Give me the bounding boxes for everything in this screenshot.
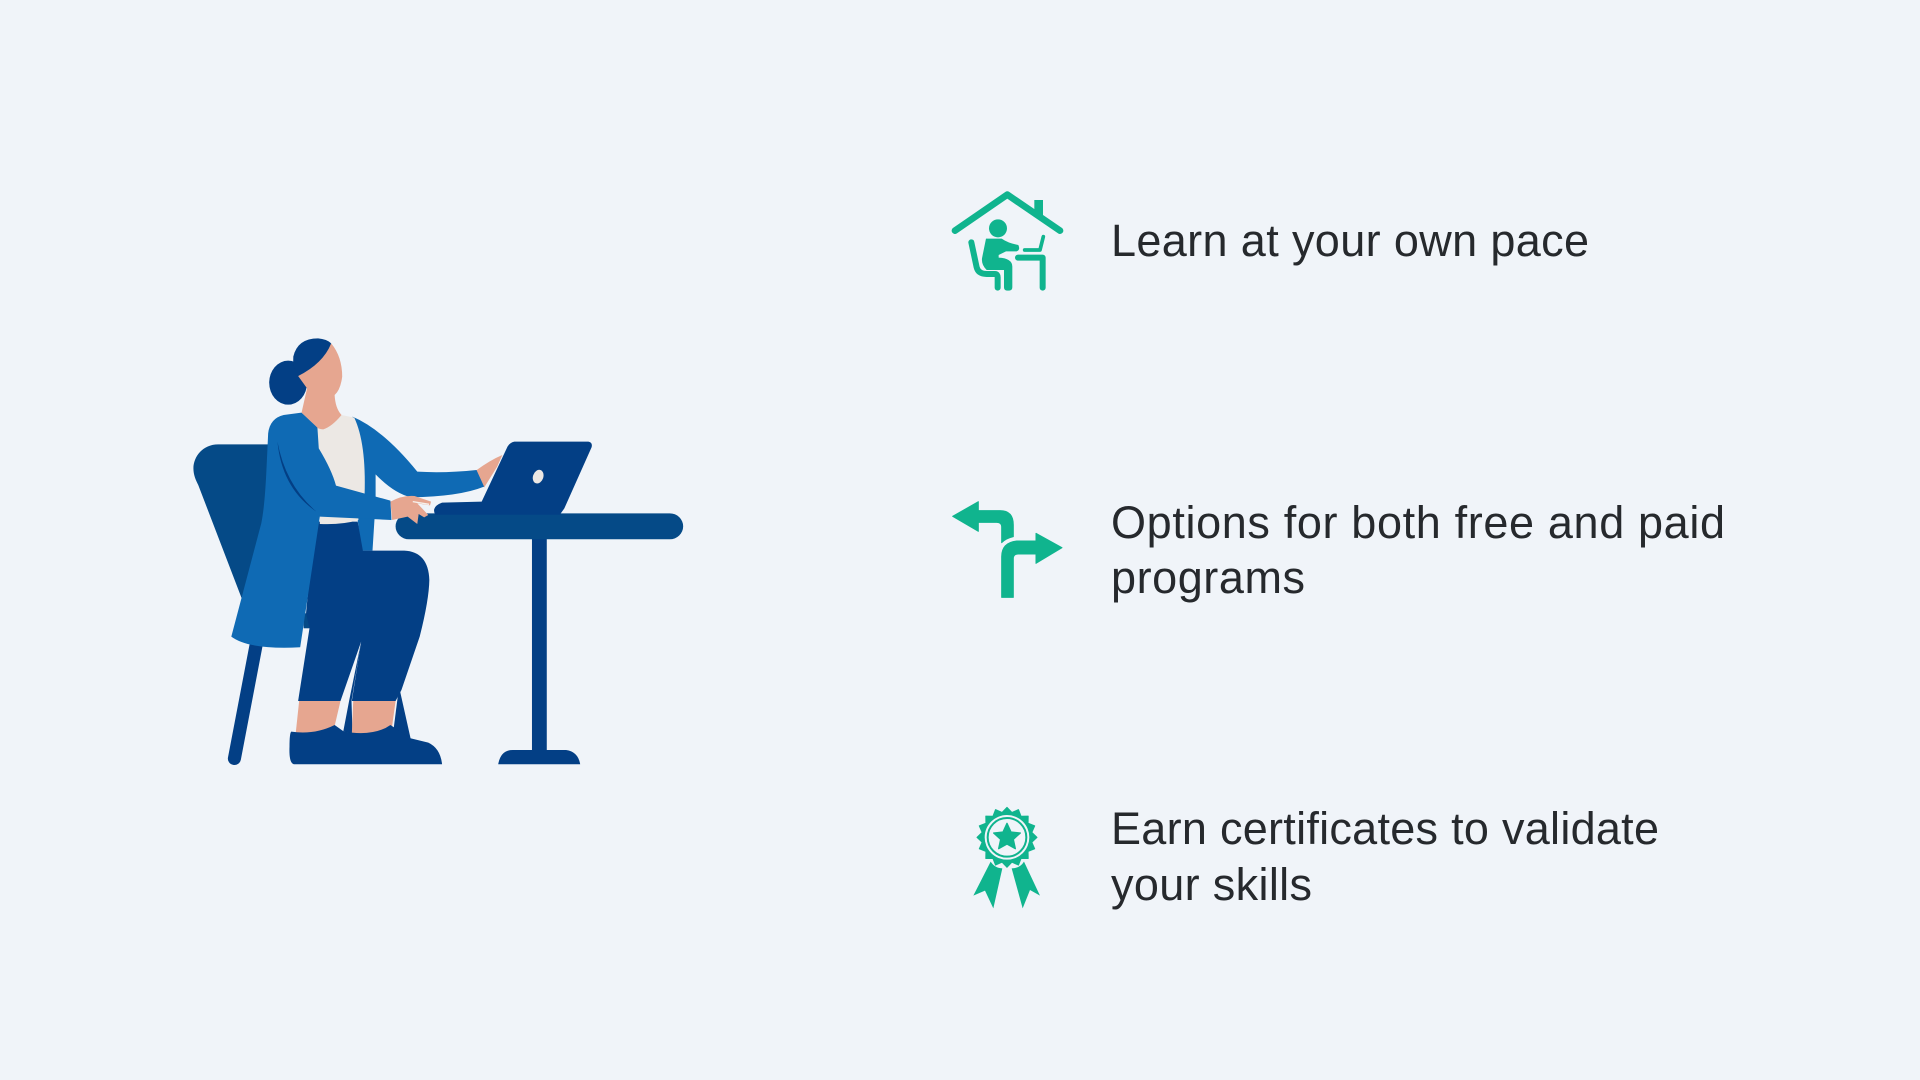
hair bun — [269, 361, 307, 405]
cardigan crease — [277, 442, 316, 512]
text: learn at your own pace: Learn at your own pace — [1111, 215, 1589, 266]
face and neck — [298, 343, 342, 429]
text: earn certificates to validate your skills: Earn certificates to validate — [1111, 803, 1659, 854]
icon: diverging arrows — [953, 502, 1062, 597]
far sleeve of cardigan — [353, 417, 484, 551]
text: earn certificates to validate your skills: your skills — [1111, 859, 1312, 910]
table — [396, 513, 683, 764]
far hand — [476, 455, 502, 488]
shoes — [289, 725, 442, 764]
hair top — [293, 338, 331, 376]
icon: award ribbon — [973, 807, 1040, 908]
icon: person studying at home — [955, 195, 1060, 291]
trousers — [298, 522, 429, 701]
illustration: woman working at a laptop — [193, 338, 683, 764]
lower legs — [296, 701, 396, 734]
chair — [193, 444, 411, 759]
text: options for free and paid programs: programs — [1111, 552, 1305, 603]
cardigan — [231, 413, 391, 648]
shirt — [316, 415, 365, 524]
near hand — [390, 496, 431, 524]
laptop — [434, 442, 592, 515]
text: options for free and paid programs — [1111, 497, 1725, 603]
text: options for free and paid programs: Options for both free and paid — [1111, 497, 1725, 548]
text: earn certificates to validate your skills — [1111, 803, 1659, 910]
